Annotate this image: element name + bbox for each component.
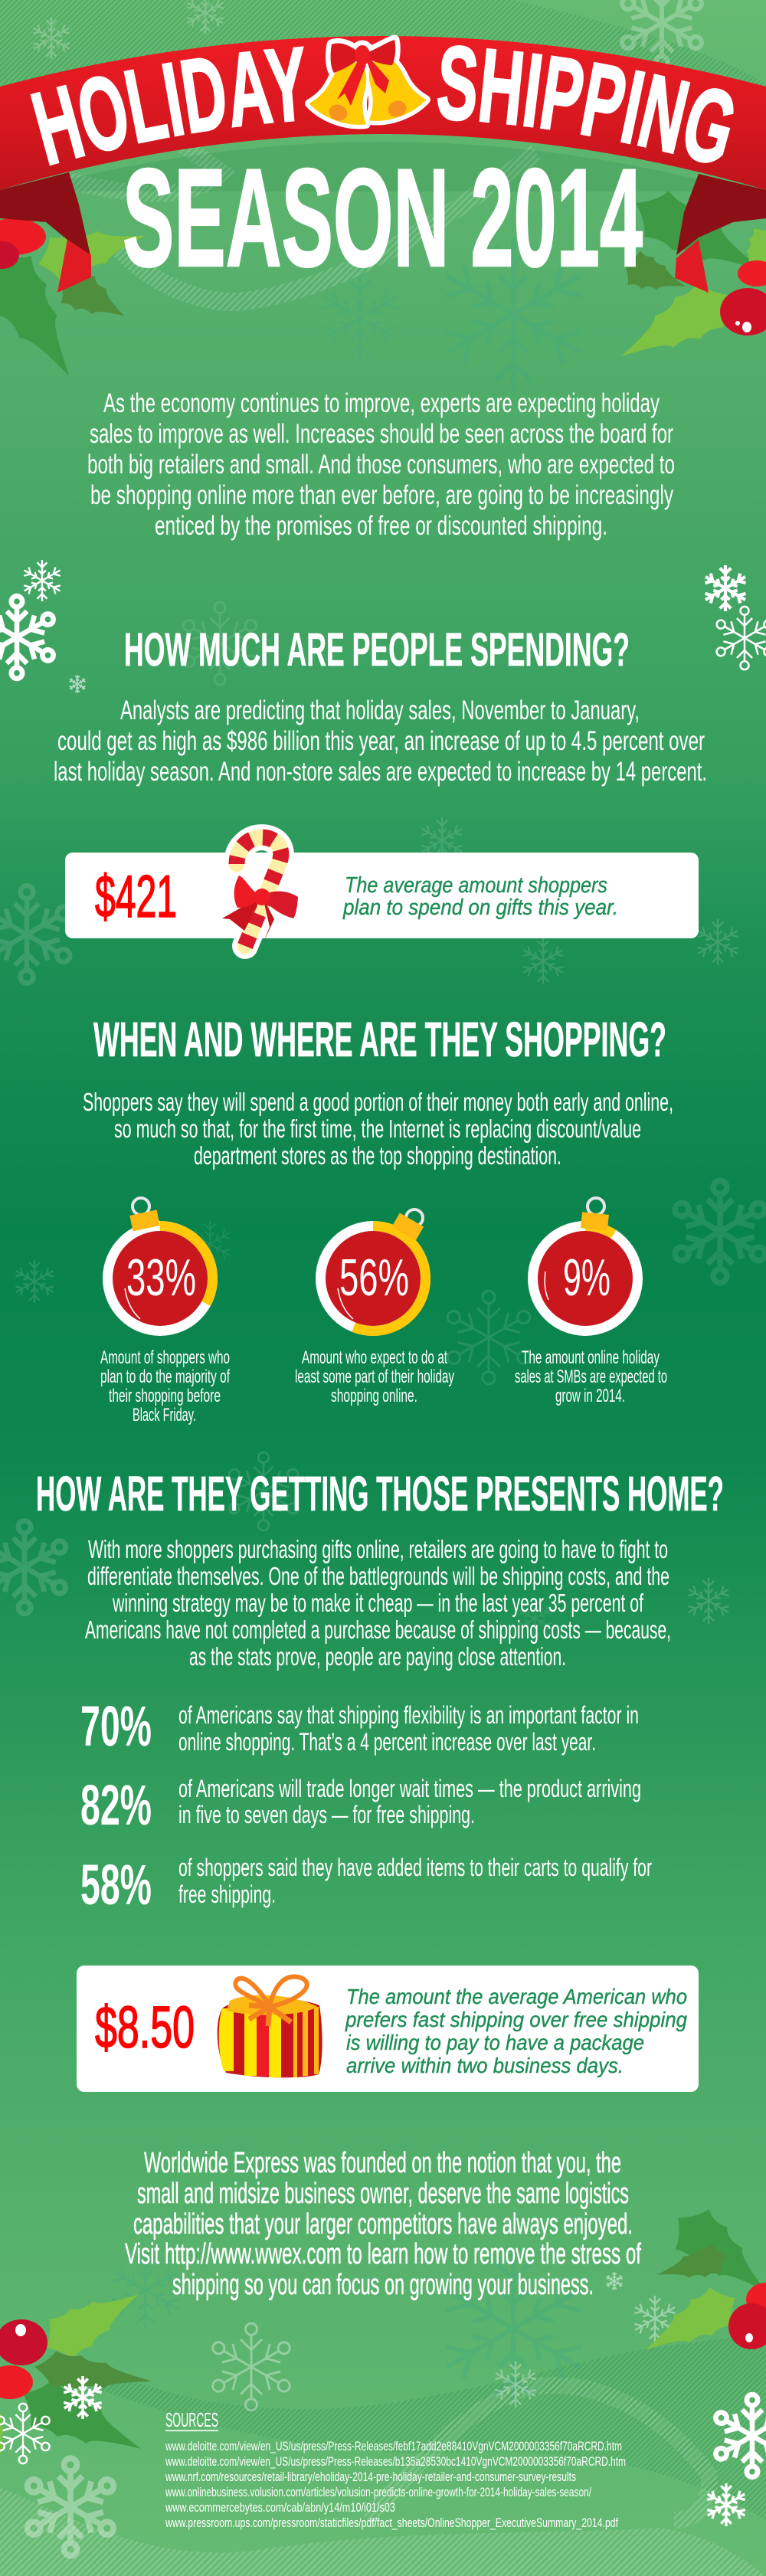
title: HOLIDAY SHIPPING on the ribbon — [31, 45, 734, 165]
spending paragraph — [54, 696, 707, 787]
callout: $8.50 card: prefers fast shipping over free shipping — [345, 2008, 687, 2031]
stat: 82%: 82% — [80, 1773, 152, 1837]
intro paragraph — [87, 388, 675, 541]
background hatch bands: top — [0, 0, 766, 302]
stat: 70%: 70% — [80, 1694, 152, 1758]
banner: ribbon with fold tails — [0, 36, 766, 293]
callout: $8.50 card: The amount the average American who — [346, 1985, 687, 2008]
caption: 9%: sales at SMBs are expected to — [515, 1367, 667, 1387]
caption: 9% — [515, 1347, 667, 1406]
ornament: 33% stat: 33% — [126, 1249, 196, 1307]
sources list: www.nrf.com/resources/retail-library/eholiday-2014-pre-holiday-retailer-and-consumer-survey-results — [165, 2470, 576, 2484]
caption: 56% — [295, 1347, 454, 1406]
callout: $421 card: The average amount shoppers — [345, 873, 607, 898]
callout: $421 card — [65, 853, 699, 938]
stat: 82%: in five to seven days — for free shipping. — [178, 1801, 475, 1828]
callout: $8.50 card: $8.50 — [95, 1995, 195, 2060]
stat: 70% — [80, 1694, 639, 1758]
stat: 58%: 58% — [80, 1853, 152, 1916]
ornament: 56% stat: 56% — [339, 1249, 409, 1307]
stat: 82% — [80, 1773, 641, 1837]
caption: 33% — [100, 1347, 230, 1425]
shopping paragraph: department stores as the top shopping destination. — [194, 1141, 561, 1170]
caption: 56%: Amount who expect to do at — [302, 1347, 447, 1368]
callout: $8.50 card: is willing to pay to have a package — [346, 2031, 644, 2054]
callout: $8.50 card: arrive within two business days. — [346, 2054, 624, 2077]
holly: top right — [608, 180, 766, 378]
caption: 33%: plan to do the majority of — [100, 1367, 230, 1387]
callout: $8.50 card — [77, 1966, 699, 2092]
shipping paragraph: as the stats prove, people are paying close attention. — [189, 1642, 566, 1671]
caption: 9%: grow in 2014. — [555, 1386, 625, 1406]
holly: bottom left — [0, 2273, 155, 2483]
callout: $421 card: plan to spend on gifts this year. — [342, 895, 618, 920]
icon: bells with bow — [307, 40, 428, 131]
icon: candy cane with bow — [222, 837, 298, 946]
caption: 56%: shopping online. — [331, 1386, 417, 1406]
ornament: 33% stat — [103, 1198, 218, 1336]
background hatch bands: bottom — [0, 2332, 766, 2576]
ornament: 56% stat — [316, 1209, 430, 1336]
caption: 33%: Black Friday. — [133, 1405, 196, 1425]
caption: 33%: Amount of shoppers who — [100, 1347, 230, 1368]
snowflakes: white accents at bottom — [0, 2376, 766, 2526]
callout: $421 card: $421 — [95, 862, 177, 930]
ornament: 9% stat: 9% — [563, 1249, 611, 1307]
shipping paragraph — [85, 1535, 671, 1671]
sources list: www.ecommercebytes.com/cab/abn/y14/m10/i01/s03 — [165, 2500, 395, 2515]
stat: 58%: free shipping. — [178, 1880, 276, 1908]
closing paragraph — [125, 2147, 641, 2301]
caption: 9%: The amount online holiday — [522, 1347, 660, 1368]
sources list: www.onlinebusiness.volusion.com/articles/volusion-predicts-online-growth-for-2014-holiday-sales-season/ — [165, 2485, 591, 2499]
shopping paragraph — [83, 1088, 673, 1170]
sources heading: SOURCES — [165, 2408, 218, 2431]
holly: bottom right — [635, 2198, 766, 2369]
snowflakes: white accents at spending section — [0, 560, 766, 679]
faint teal snowflakes behind title — [108, 237, 589, 2405]
ornament: 9% stat — [528, 1198, 643, 1336]
icon: gift box — [218, 1977, 322, 2077]
sources list — [165, 2439, 626, 2530]
holly: top left — [0, 213, 152, 393]
sources heading — [165, 2408, 218, 2431]
title: HOLIDAY SHIPPING on the ribbon: HOLIDAY — [31, 46, 304, 165]
stat: 58% — [80, 1853, 652, 1916]
caption: 56%: least some part of their holiday — [295, 1367, 454, 1387]
caption: 33%: their shopping before — [109, 1386, 221, 1406]
